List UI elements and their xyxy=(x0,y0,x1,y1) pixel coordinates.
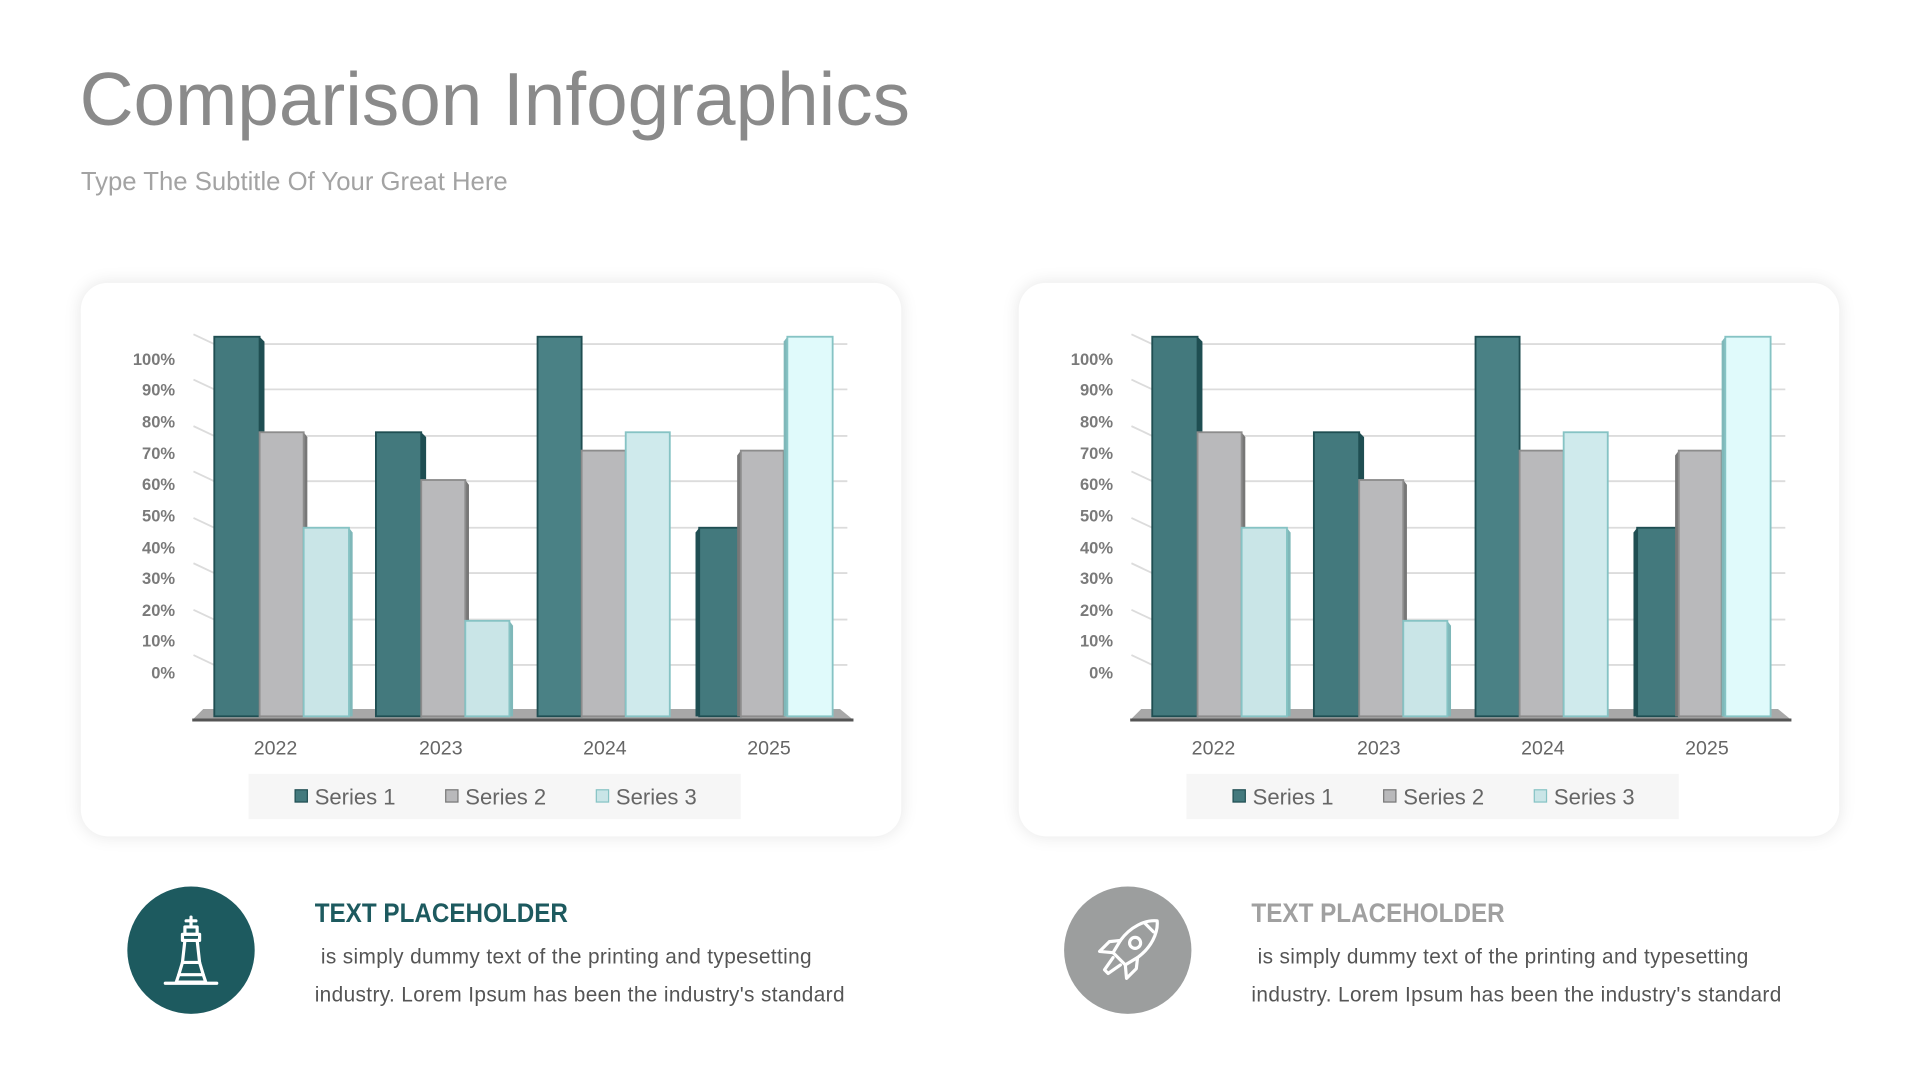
bar chart: left: Series 1 xyxy=(315,784,396,809)
title: Comparison Infographics xyxy=(80,58,910,141)
bar chart: right xyxy=(1071,334,1792,819)
bar chart: right: 50% xyxy=(1080,507,1113,526)
bar chart: left: 100% xyxy=(133,350,175,369)
bar chart: left: 2025 xyxy=(747,737,791,759)
bar chart: right: 30% xyxy=(1080,569,1113,588)
text block: left: is simply dummy text of the printing and typesetting xyxy=(321,945,812,969)
text block: left: industry. Lorem Ipsum has been the industry's standard xyxy=(315,983,845,1007)
text block: right: TEXT PLACEHOLDER xyxy=(1251,898,1505,928)
bar chart: right: 2023 xyxy=(1357,737,1401,759)
bar chart: right: 70% xyxy=(1080,444,1113,463)
bar chart: right: 0% xyxy=(1089,663,1113,682)
panel: right chart card xyxy=(1019,283,1839,836)
bar chart: right: Series 2 xyxy=(1403,784,1484,809)
bar chart: right: Series 1 xyxy=(1253,784,1333,809)
text block: right: industry. Lorem Ipsum has been the industry's standard xyxy=(1251,983,1782,1007)
text block: left xyxy=(315,898,845,1007)
bar chart: left: 60% xyxy=(142,475,175,494)
bar chart: left: 30% xyxy=(142,569,175,588)
bar chart: right: 2024 xyxy=(1521,737,1565,759)
bar chart: left: 80% xyxy=(142,412,175,431)
icon: rocket xyxy=(1064,887,1191,1014)
bar chart: right: 40% xyxy=(1080,538,1113,557)
bar chart: left xyxy=(133,334,854,819)
text block: left: TEXT PLACEHOLDER xyxy=(315,898,568,928)
bar chart: left: 2022 xyxy=(254,737,297,759)
bar chart: left: 0% xyxy=(151,663,175,682)
subtitle: Type The Subtitle Of Your Great Here xyxy=(81,168,508,196)
bar chart: left: Series 3 xyxy=(616,784,697,809)
panel: left chart card xyxy=(81,283,901,836)
bar chart: left: 20% xyxy=(142,601,175,620)
bar chart: right: 20% xyxy=(1080,601,1113,620)
bar chart: right: 100% xyxy=(1071,350,1113,369)
bar chart: left: 70% xyxy=(142,444,175,463)
bar chart: right: Series 3 xyxy=(1554,784,1635,809)
text block: right: is simply dummy text of the printing and typesetting xyxy=(1258,945,1749,969)
bar chart: left: 2024 xyxy=(583,737,627,759)
bar chart: left: 90% xyxy=(142,381,175,400)
bar chart: left: 50% xyxy=(142,507,175,526)
bar chart: right: 90% xyxy=(1080,381,1113,400)
bar chart: right: 80% xyxy=(1080,412,1113,431)
text block: right xyxy=(1251,898,1782,1007)
bar chart: right: 2022 xyxy=(1192,737,1235,759)
icon: chess king xyxy=(127,887,255,1014)
bar chart: left: Series 2 xyxy=(465,784,546,809)
bar chart: left: 2023 xyxy=(419,737,463,759)
bar chart: right: 60% xyxy=(1080,475,1113,494)
bar chart: left: 10% xyxy=(142,632,175,651)
bar chart: right: 10% xyxy=(1080,632,1113,651)
bar chart: left: 40% xyxy=(142,538,175,557)
bar chart: right: 2025 xyxy=(1685,737,1729,759)
